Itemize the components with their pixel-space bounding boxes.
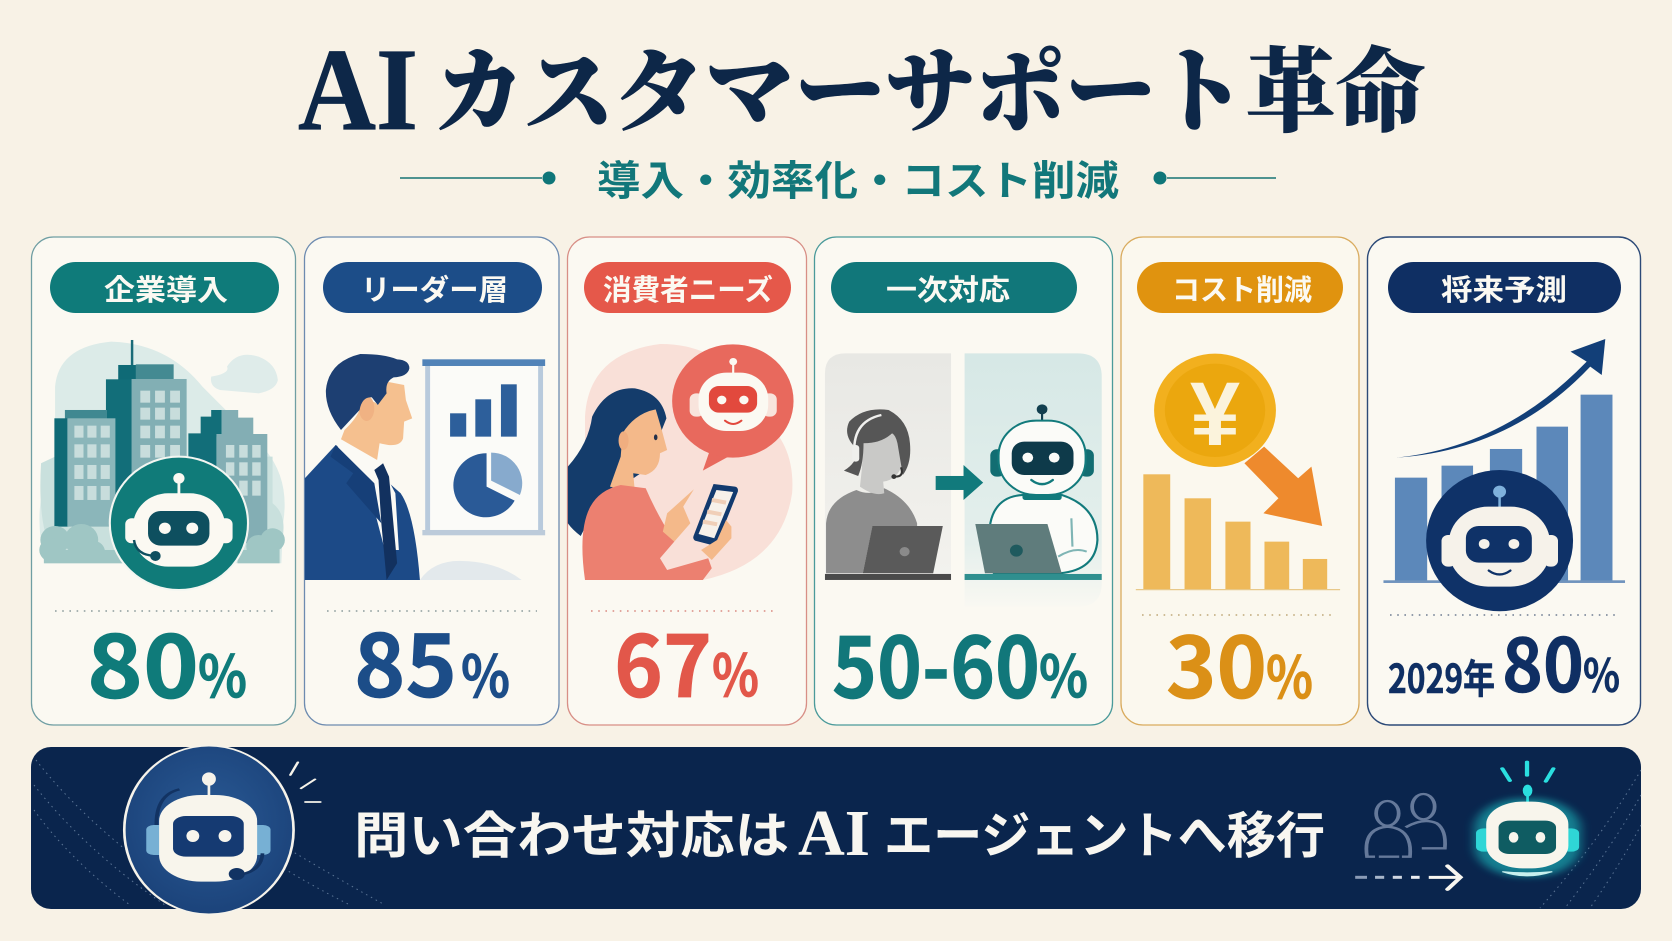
heading pill: 消費者ニーズ: 消費者ニーズ — [603, 267, 773, 309]
illustration: rising bars, arrow and robot — [1383, 339, 1625, 611]
title: カスタマーサポート革命 — [434, 19, 1426, 151]
stat: 67%: 67 — [614, 599, 712, 722]
panel: コスト削減 — [1121, 237, 1359, 725]
heading pill: 将来予測: 将来予測 — [1441, 267, 1567, 309]
stat: 30%: % — [1266, 631, 1313, 715]
stat: 67%: % — [712, 629, 759, 713]
icon: robot speech bubble — [672, 344, 794, 471]
icon: robot medallion — [124, 746, 294, 914]
heading pill: コスト削減: コスト削減 — [1172, 267, 1312, 309]
illustration: business leader with chart board — [305, 354, 545, 580]
panel: 企業導入 — [32, 237, 296, 725]
arrow: growth — [1397, 339, 1605, 458]
icon: human agents — [1366, 794, 1445, 857]
arrow: cost down — [1244, 447, 1322, 526]
icon: yen coin — [1154, 354, 1276, 467]
title: AI — [298, 24, 418, 155]
panel: 消費者ニーズ — [568, 237, 806, 725]
stat: 50-60%: 50-60 — [832, 602, 1040, 723]
heading pill: リーダー層: リーダー層 — [361, 267, 508, 309]
banner: AI agent migration — [31, 746, 1641, 914]
heading pill: 一次対応 — [831, 262, 1077, 313]
banner message: エージェントへ移行 — [884, 796, 1325, 868]
illustration: consumer with phone and robot speech bubble — [568, 344, 794, 580]
heading pill: 企業導入: 企業導入 — [104, 267, 228, 309]
subtitle with rules — [400, 147, 1276, 207]
icon: sparkle rays — [290, 762, 320, 802]
stat: 2029年 80% — [1388, 607, 1620, 714]
banner message: AI — [798, 797, 870, 870]
stat: 2029年 80%: % — [1583, 640, 1620, 706]
icon: human operator — [825, 409, 951, 580]
heading pill: 一次対応: 一次対応 — [886, 267, 1010, 309]
stat: 85%: % — [461, 630, 510, 714]
stat: 80%: 80 — [87, 598, 199, 723]
icon: robot with laptop — [965, 404, 1102, 580]
stat: 2029年 80%: 80 — [1502, 607, 1584, 714]
stat: 50-60%: % — [1039, 630, 1088, 714]
stat: 85%: 85 — [354, 597, 457, 722]
panel: リーダー層 — [304, 237, 559, 725]
stat: 80%: % — [198, 630, 247, 714]
arrow: human to AI — [936, 465, 983, 500]
panel: コスト削減: ¥ — [1190, 365, 1240, 465]
illustration: yen coin with falling bars — [1136, 354, 1340, 590]
subtitle with rules: 導入・効率化・コスト削減 — [597, 147, 1119, 207]
stat: 85% — [354, 597, 510, 722]
stat: 67% — [614, 599, 759, 722]
stat: 30%: 30 — [1166, 602, 1267, 723]
banner message — [354, 796, 1325, 870]
icon: smartphone — [693, 484, 738, 546]
heading pill: 将来予測 — [1388, 262, 1621, 313]
heading pill: 企業導入 — [50, 262, 279, 313]
stat: 80% — [87, 598, 247, 723]
heading pill: リーダー層 — [323, 262, 542, 313]
icon: glowing AI robot — [1474, 762, 1581, 877]
icon: robot badge — [110, 457, 248, 590]
panel: 将来予測 — [1368, 237, 1640, 725]
illustration: human agent handing off to robot — [825, 353, 1102, 607]
arrow: dashed handoff — [1355, 866, 1460, 889]
icon: robot badge — [1426, 470, 1573, 611]
panel: 一次対応 — [814, 237, 1112, 725]
heading pill: コスト削減 — [1137, 262, 1343, 313]
banner message: 問い合わせ対応は — [354, 796, 789, 868]
stat: 2029年 80%: 2029年 — [1388, 647, 1495, 705]
illustration: office buildings with robot badge — [39, 340, 285, 590]
stat: 30% — [1166, 602, 1313, 723]
heading pill: 消費者ニーズ — [584, 262, 791, 313]
